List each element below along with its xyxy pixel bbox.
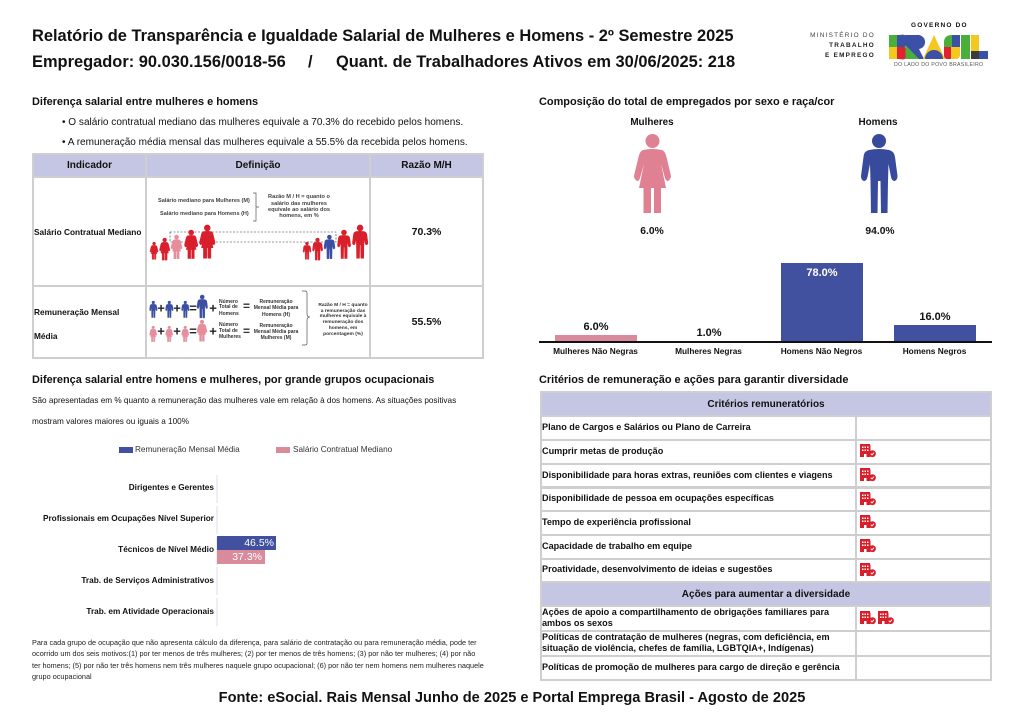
bullet text 1: • O salário contratual mediano das mulheres equivale a 70.3% do recebido pelos homens. [62,117,463,128]
icons: building check markers [860,444,894,624]
row: contratação: Políticas de contratação de mulheres (negras, com deficiência, em situação de violência, chefes de família, LGBTQIA+, Indígenas) [542,632,830,652]
header: ações: Ações para aumentar a diversidade [682,588,850,600]
diagram: remuneração média: + [173,324,181,338]
header: critérios remuneratórios: Critérios remuneratórios [707,398,825,410]
row: ocupações específicas [540,486,857,512]
legend [119,445,392,454]
cell: experiência [855,510,992,536]
axis line [539,341,992,343]
diagram: remuneração média: Homens [219,311,239,317]
row: plano de cargos: Plano de Cargos e Salários ou Plano de Carreira [542,422,751,432]
row: metas [540,439,857,465]
diagram: remuneração média: mulheres equivale à [320,313,367,319]
row: metas: Cumprir metas de produção [542,446,663,456]
cell: equipe [855,534,992,560]
label: operacionais: Trab. em Atividade Operacionais [86,607,214,616]
diagram: remuneração média: = [243,299,250,313]
diagram: salário mediano: Razão M / H = quanto o [268,194,330,200]
icon: man [861,134,898,213]
logo: Governo do Brasil: DO LADO DO POVO BRASILEIRO [894,62,983,68]
footnote: ocorrido um dos seis motivos:(1) por ter menos de três mulheres; (2) por ter menos de três homens; (3) por não ter mulheres; (4) por não [32,649,475,658]
heading: diferença salarial: Diferença salarial entre mulheres e homens [32,96,258,108]
bar: técnicos remuneração [217,536,276,550]
cell: compartilhamento [855,605,992,632]
value: 55.5%: 55.5% [412,316,441,328]
legend label: remuneração: Remuneração Mensal Média [135,445,240,454]
diagram: salário mediano: Salário mediano para Homens (H) [160,211,249,217]
bar: homens negros [894,325,976,342]
value: 1.0%: 1.0% [696,327,722,339]
row label: salário contratual [32,176,147,287]
diagram: remuneração média: Mensal Média para [254,305,298,311]
diagram: remuneração média: Total de [219,304,238,310]
source: Fonte: eSocial. Rais Mensal Junho de 2025 e Portal Emprega Brasil - Agosto de 2025 [219,690,805,706]
label: serviços administrativos: Trab. de Serviços Administrativos [81,576,214,585]
diagram: remuneração média: Remuneração [259,323,293,329]
heading: grandes grupos ocupacionais: Diferença salarial entre homens e mulheres, por grande grupos ocupacionais [32,374,434,386]
label: Homens: Homens [859,117,897,128]
diagram: salário mediano: salário das mulheres [271,201,327,207]
row: experiência [540,510,857,536]
value: 70.3% [369,176,484,287]
row: compartilhamento: Ações de apoio a compartilhamento de obrigações familiares para ambos os sexos [542,606,829,628]
title: Relatório de Transparência e Igualdade Salarial de Mulheres e Homens - 2º Semestre 2025 [32,27,733,45]
bullet text 2: • A remuneração média mensal das mulheres equivale a 55.5% da recebida pelos homens. [62,137,468,148]
employer line: / [308,53,313,71]
label: dirigentes: Dirigentes e Gerentes [129,483,214,492]
header: Razão [369,153,484,178]
diagram: remuneração média: a remuneração das [321,308,366,314]
header: Indicador: Indicador [67,160,112,171]
diagram: remuneração média: Homens (H) [262,312,290,318]
diagram: remuneração média: Número [219,299,238,305]
bar: homens não negros [781,263,863,342]
diagram: remuneração média: Número [219,322,238,328]
cell: ocupações específicas [855,486,992,512]
cell: horas extras [855,463,992,489]
cell: promoção [855,655,992,681]
diagram: remuneração média: porcentagem (%) [323,331,363,337]
logo: Ministério do Trabalho e Emprego: E EMPREGO [825,52,875,59]
row: experiência: Tempo de experiência profissional [542,516,691,526]
header: ações [540,581,992,607]
row: proatividade [540,558,857,583]
value: mulheres 6.0%: 6.0% [640,226,664,237]
diagram: remuneração média: + [157,300,165,316]
row: horas extras [540,463,857,489]
bar: técnicos remuneração: 46.5% [244,537,274,549]
heading: composição: Composição do total de empregados por sexo e raça/cor [539,96,834,108]
row: promoção [540,655,857,681]
diagram: remuneração média: Mulheres (M) [261,335,292,341]
diagram: remuneração média: = [189,300,197,316]
row label: remuneração: Remuneração Mensal [34,307,119,317]
diagram: remuneração média: Mensal Média para [254,329,298,335]
row: horas extras: Disponibilidade para horas extras, reuniões com clientes e viagens [542,470,833,480]
diagram: remuneração média: homens, em [329,325,358,331]
diagram: remuneração média: + [157,324,165,338]
bar chart: composição por raça/cor [539,263,992,356]
diagram: remuneração média: + [173,300,181,316]
table: indicadores [32,153,484,359]
row: proatividade: Proatividade, desenvolvimento de ideias e sugestões [542,564,772,574]
bar: mulheres não negras [555,335,637,342]
diagram: salário mediano: homens, em % [279,213,319,219]
logo: Governo do Brasil: GOVERNO DO [911,22,968,29]
bar chart: grupos ocupacionais [43,475,276,626]
description: mostram valores maiores ou iguais a 100% [32,417,189,426]
value: 16.0%: 16.0% [919,311,951,323]
diagram: remuneração média: Mulheres [219,334,241,340]
cell: contratação [855,630,992,657]
description [32,396,456,426]
category: homens não negros: Homens Não Negros [781,346,862,356]
legend label: salário: Salário Contratual Mediano [293,445,392,454]
footnote: Para cada grupo de ocupação que não apresenta cálculo da diferença, para salário de contratação ou para remuneração média, pode ter [32,638,477,647]
category: mulheres não negras: Mulheres Não Negras [553,346,638,356]
bar: técnicos salário [217,550,265,564]
header: Razão: Razão M/H [401,160,452,171]
row label: remuneração: Média [34,331,58,341]
diagram: remuneração média: = [243,324,250,338]
cell: plano de cargos [855,415,992,441]
diagram: remuneração média: + [209,324,217,338]
definition graphic: remuneração [145,285,371,359]
bar: técnicos salário: 37.3% [232,551,262,563]
category: homens negros: Homens Negros [903,346,966,356]
footnote [32,638,484,681]
legend: remuneração [119,447,133,453]
row: promoção: Políticas de promoção de mulheres para cargo de direção e gerência [542,662,840,672]
description: São apresentadas em % quanto a remuneração das mulheres vale em relação à dos homens. As situações positivas [32,396,456,405]
employer line [32,53,735,71]
label: técnicos: Técnicos de Nível Médio [118,545,214,554]
heading: critérios: Critérios de remuneração e ações para garantir diversidade [539,374,848,386]
diagram: remuneração média: Razão M / H = quanto [318,302,368,308]
label: profissionais: Profissionais em Ocupações Nível Superior [43,514,214,523]
diagram: salário mediano: Salário mediano para Mulheres (M) [158,198,250,204]
table: critérios e ações [540,391,992,681]
employer line: Empregador: 90.030.156/0018-56 [32,53,286,71]
header: Definição [145,153,371,178]
definition graphic: salário [145,176,371,287]
diagram: remuneração média [149,290,368,346]
header: critérios remuneratórios [540,391,992,417]
diagram: remuneração média: + [209,300,217,316]
bar: mulheres negras [668,341,750,342]
diagram: remuneração média: Remuneração [259,299,293,305]
row: plano de cargos [540,415,857,441]
logo: Ministério do Trabalho e Emprego: MINISTÉRIO DO [810,32,875,39]
label: Mulheres: Mulheres [630,117,674,128]
row label: remuneração [32,285,147,359]
row: ocupações específicas: Disponibilidade de pessoa em ocupações específicas [542,492,774,502]
cell: metas [855,439,992,465]
value: homens 94.0%: 94.0% [865,226,895,237]
value: 78.0%: 78.0% [806,267,838,279]
row: equipe [540,534,857,560]
value: 55.5% [369,285,484,359]
value: 6.0%: 6.0% [583,321,609,333]
header: Indicador [32,153,147,178]
legend: salário [276,447,290,453]
footnote: grupo ocupacional [32,672,92,681]
icon: woman [634,134,671,213]
diagram: remuneração média: = [189,324,197,338]
logo: Governo do Brasil [889,22,988,68]
row: equipe: Capacidade de trabalho em equipe [542,540,692,550]
value: 70.3%: 70.3% [412,226,441,238]
employer line: Quant. de Trabalhadores Ativos em 30/06/2025: 218 [336,53,735,71]
diagram: salário mediano [150,192,368,260]
diagram: remuneração média: remuneração dos [323,319,364,325]
header: Definição: Definição [235,160,280,171]
cell: proatividade [855,558,992,583]
logo: Ministério do Trabalho e Emprego [810,31,875,59]
category: mulheres negras: Mulheres Negras [675,346,742,356]
diagram: salário mediano: equivale ao salário dos [268,207,330,213]
row label: salário contratual: Salário Contratual Mediano [34,226,141,236]
footnote: ter homens; (5) por não ter três homens nem três mulheres naquele grupo ocupacional; (6) por não ter nem homens nem mulheres naquele [32,661,484,670]
diagram: remuneração média: Total de [219,328,238,334]
logo: Ministério do Trabalho e Emprego: TRABALHO [829,42,875,49]
